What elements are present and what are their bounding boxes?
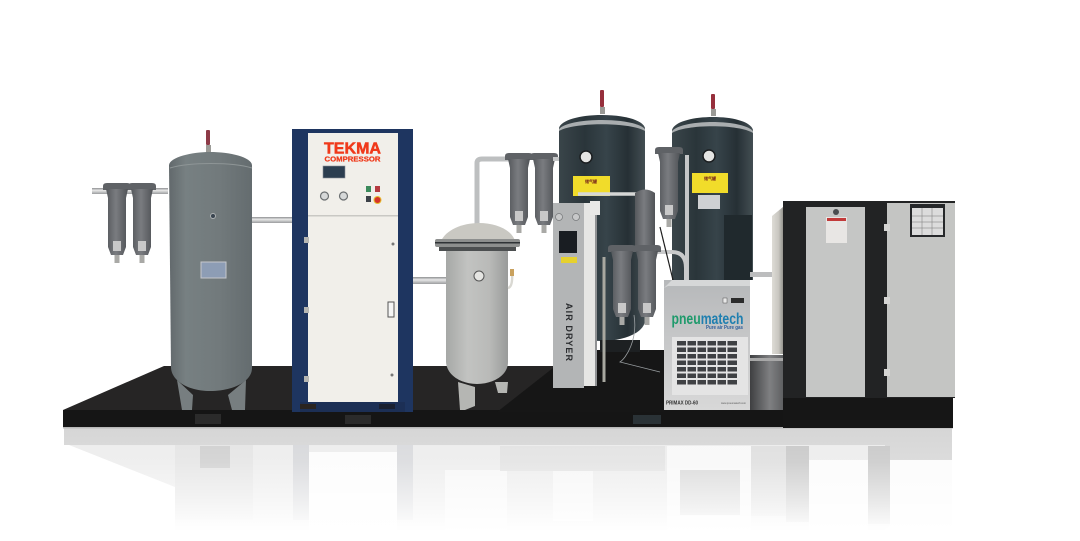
left filters and pipe: [92, 183, 168, 263]
model label: PRIMAX DD-60: [666, 400, 698, 406]
digital display: [323, 166, 345, 178]
dark tanks: [559, 90, 753, 352]
dryer gauges: [556, 214, 580, 220]
pipe: cabinet to vessel: [413, 277, 447, 284]
grey filter vessel: [435, 223, 520, 410]
control cabinet: [292, 129, 413, 412]
platform: [63, 350, 953, 428]
compressor panels: [806, 207, 865, 397]
refrigerated dryer box: Pure air Pure gas: [706, 325, 743, 331]
air dryer unit: [553, 201, 600, 388]
air pipes and filters cluster: [578, 147, 687, 382]
logo: TEKMA COMPRESSOR: TEKMA: [324, 140, 381, 158]
brand text: pneumatech: [672, 311, 744, 328]
grey air receiver tank: [169, 130, 252, 410]
vent grille: [677, 341, 737, 384]
tank right: [672, 94, 753, 280]
pipe up to upper filters: [477, 159, 510, 225]
hinges: [884, 224, 890, 376]
gauges: [320, 192, 348, 200]
upper filters: [505, 153, 559, 233]
spec plate: [910, 204, 945, 237]
pipe: tank to cabinet: [252, 217, 293, 223]
dryer label: AIR DRYER: [564, 303, 574, 362]
floor reflection: [60, 428, 960, 541]
door handle and hinges: [304, 237, 394, 382]
tank right: 储气罐: [704, 175, 716, 181]
tank left: [559, 90, 645, 352]
refrigerated dryer box: www.pneumatech.com: [721, 401, 746, 405]
compressor unit: [750, 201, 955, 428]
tank left: 储气罐: [585, 178, 597, 184]
refrigerated dryer box: [664, 280, 750, 410]
buttons: [366, 186, 381, 204]
warning label: [826, 209, 847, 243]
logo: TEKMA COMPRESSOR: COMPRESSOR: [324, 154, 381, 164]
dryer controller: [559, 231, 577, 253]
